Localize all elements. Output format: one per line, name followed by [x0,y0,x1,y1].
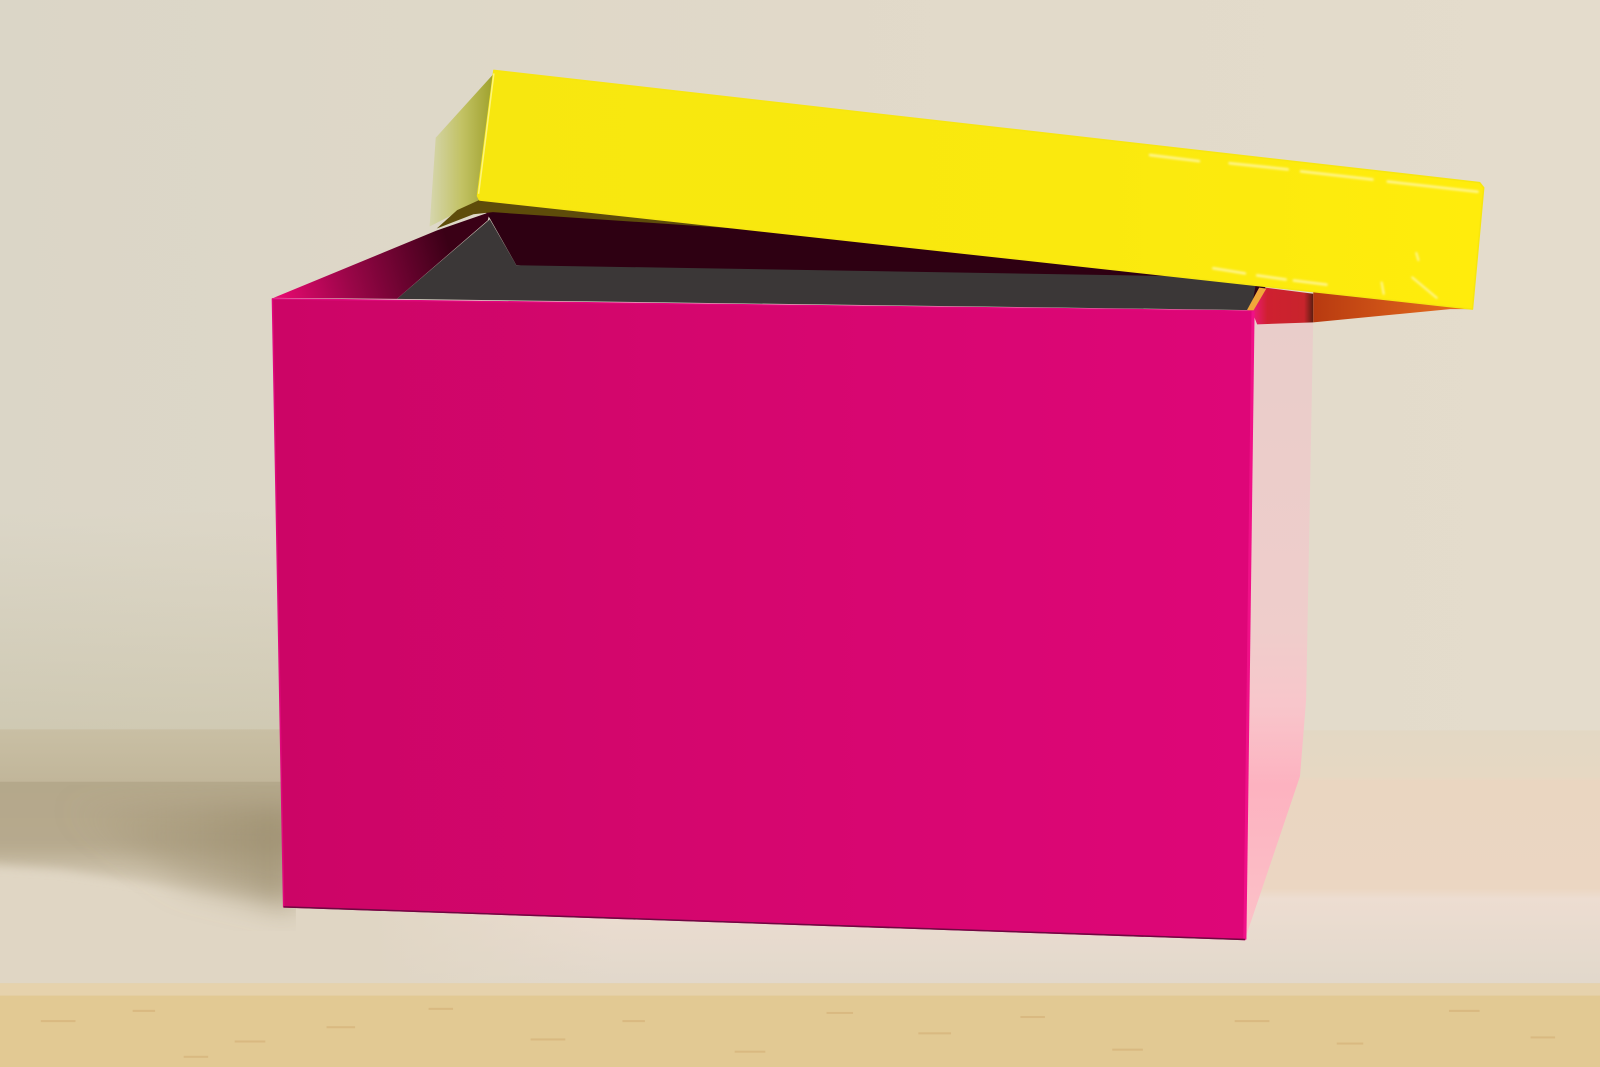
lid left side [430,73,494,226]
interior grey wall [397,219,1257,310]
lid inner rim, olive [437,200,735,228]
inner corner, orange [1247,288,1266,311]
interior back wall, maroon [473,194,1265,306]
box shadow on table [0,765,306,910]
box interior [273,194,1266,311]
wall background [0,0,1600,736]
back band of table, left [0,729,296,781]
box bottom edge [284,907,1245,939]
interior left flap [273,212,490,299]
lid front face [478,70,1484,309]
lid left-edge highlight [479,73,494,194]
box front face [272,299,1253,939]
lid underside, orange [1313,292,1471,322]
box right side, pale reflective face [1245,316,1313,939]
lid glare marks [1150,155,1478,298]
box front rim [1245,311,1253,939]
table front edge with wood grain [0,983,1600,1067]
table top [0,730,1600,985]
box side top strip [1252,288,1313,324]
